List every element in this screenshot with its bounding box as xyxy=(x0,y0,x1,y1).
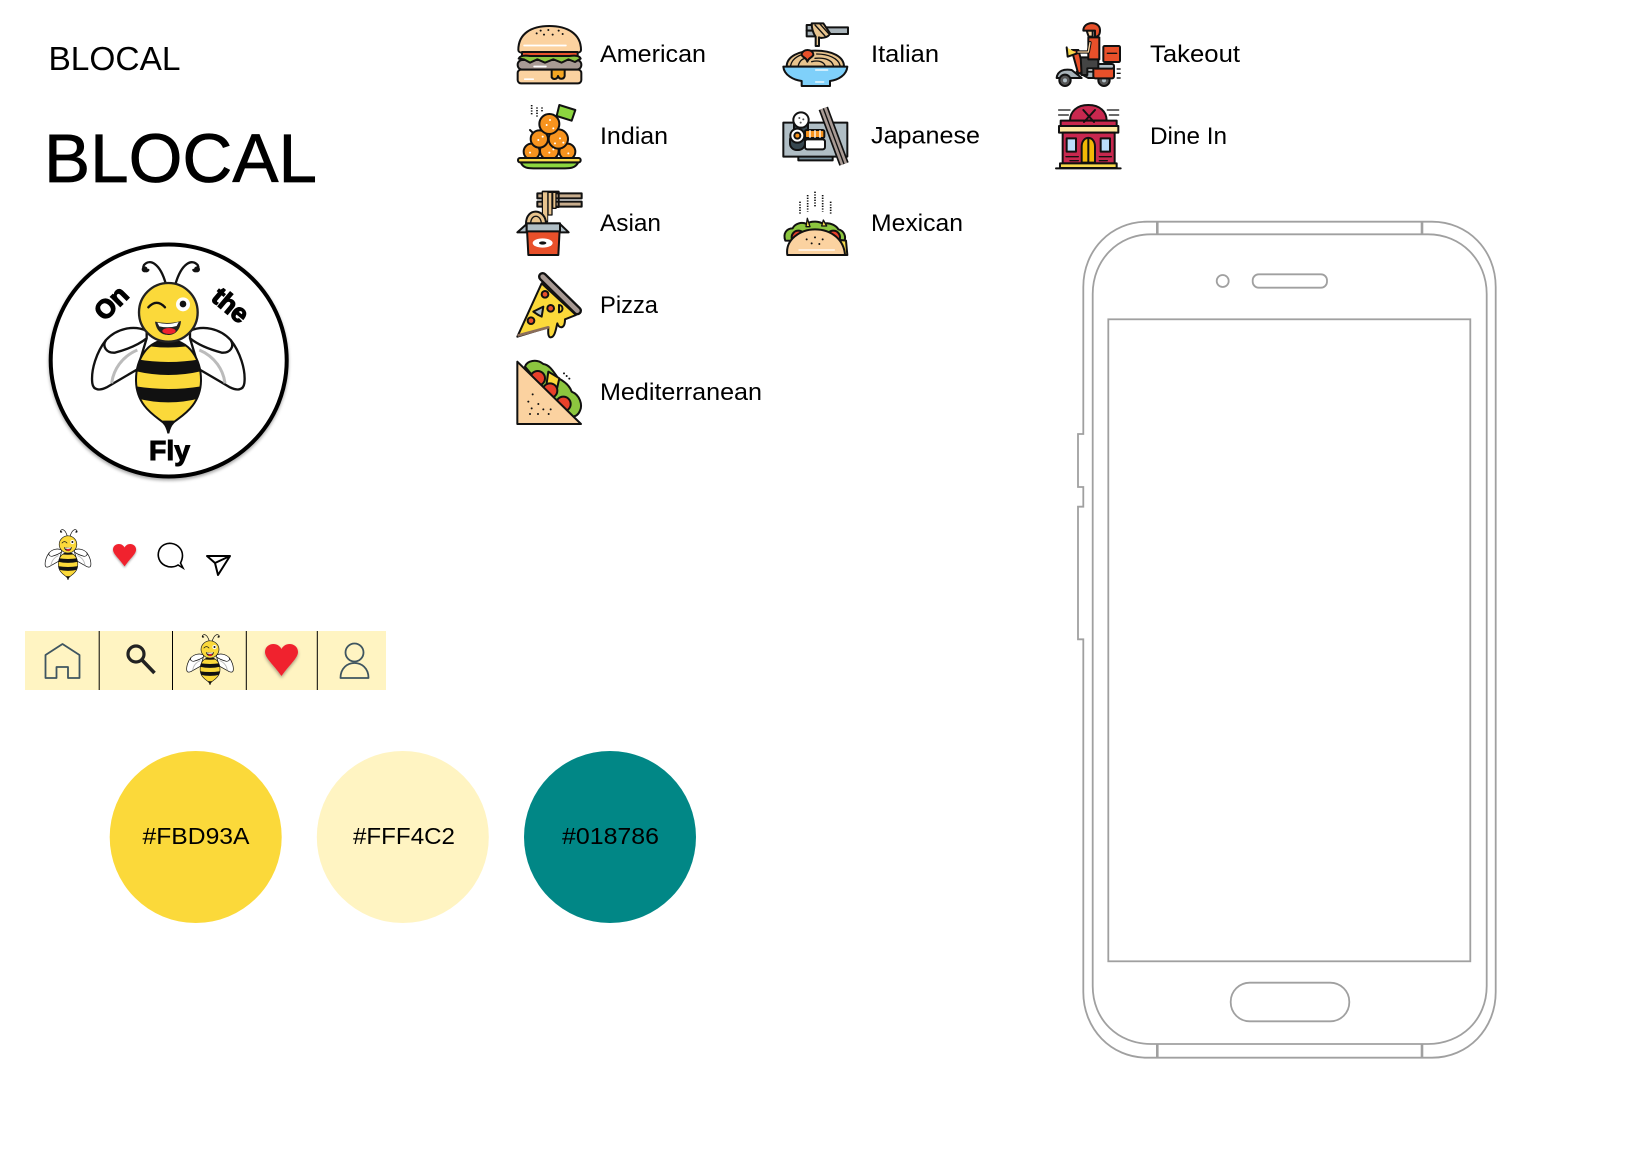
swatch: FBD93A: #FBD93A xyxy=(142,823,250,849)
icon: burger xyxy=(518,26,581,83)
icon: user xyxy=(340,644,368,678)
phone screen xyxy=(1108,319,1470,961)
label: Japanese: Japanese xyxy=(871,122,980,150)
icon: restaurant building xyxy=(1056,105,1121,168)
swatch: 018786 xyxy=(524,751,696,923)
swatch: FFF4C2: #FFF4C2 xyxy=(353,823,455,849)
phone body inner xyxy=(1093,234,1487,1044)
icon: nav heart xyxy=(265,644,298,676)
navigation bar xyxy=(25,631,386,690)
label: American: American xyxy=(600,41,706,68)
swatch: FBD93A xyxy=(110,751,282,923)
icon: nav bee xyxy=(187,635,233,686)
social icon row xyxy=(45,530,230,581)
phone antenna bands xyxy=(1157,222,1422,1058)
swatch: FFF4C2 xyxy=(317,751,489,923)
phone outline xyxy=(1078,222,1496,1058)
icon: delivery scooter xyxy=(1057,23,1121,86)
icon: search xyxy=(128,646,154,673)
swatch: 018786: #018786 xyxy=(562,823,659,849)
icon: taco xyxy=(784,192,847,255)
icon: comment bubble xyxy=(158,543,183,568)
icon: home xyxy=(46,644,80,678)
label: Takeout: Takeout xyxy=(1150,41,1240,68)
label: Pizza: Pizza xyxy=(600,292,659,319)
logo: On the Fly bee badge: the xyxy=(206,281,255,329)
icon: spaghetti bowl xyxy=(783,23,848,86)
icon: small heart xyxy=(113,544,136,566)
label: Dine In: Dine In xyxy=(1150,123,1227,150)
logo: On the Fly bee badge xyxy=(51,244,287,476)
phone body outer xyxy=(1078,222,1496,1058)
heading: small BLOCAL: BLOCAL xyxy=(48,40,180,77)
icon: send xyxy=(207,556,230,575)
logo: On the Fly bee badge: Fly xyxy=(149,435,190,466)
label: Mexican: Mexican xyxy=(871,210,963,237)
label: Mediterranean: Mediterranean xyxy=(600,379,762,406)
phone camera xyxy=(1217,275,1229,287)
logo: On the Fly bee badge: On xyxy=(88,279,134,326)
icon: sandwich wrap xyxy=(517,361,581,424)
icon: sushi tray xyxy=(783,108,847,164)
heading: large BLOCAL: BLOCAL xyxy=(44,120,317,197)
phone home button xyxy=(1231,983,1349,1021)
icon: small bee xyxy=(45,530,91,581)
icon: pizza slice xyxy=(517,277,577,337)
icon: laddoo plate xyxy=(518,105,581,168)
phone speaker xyxy=(1253,274,1327,288)
label: Italian: Italian xyxy=(871,41,939,68)
label: Indian: Indian xyxy=(600,123,668,150)
label: Asian: Asian xyxy=(600,210,661,237)
icon: noodle box xyxy=(517,192,582,255)
